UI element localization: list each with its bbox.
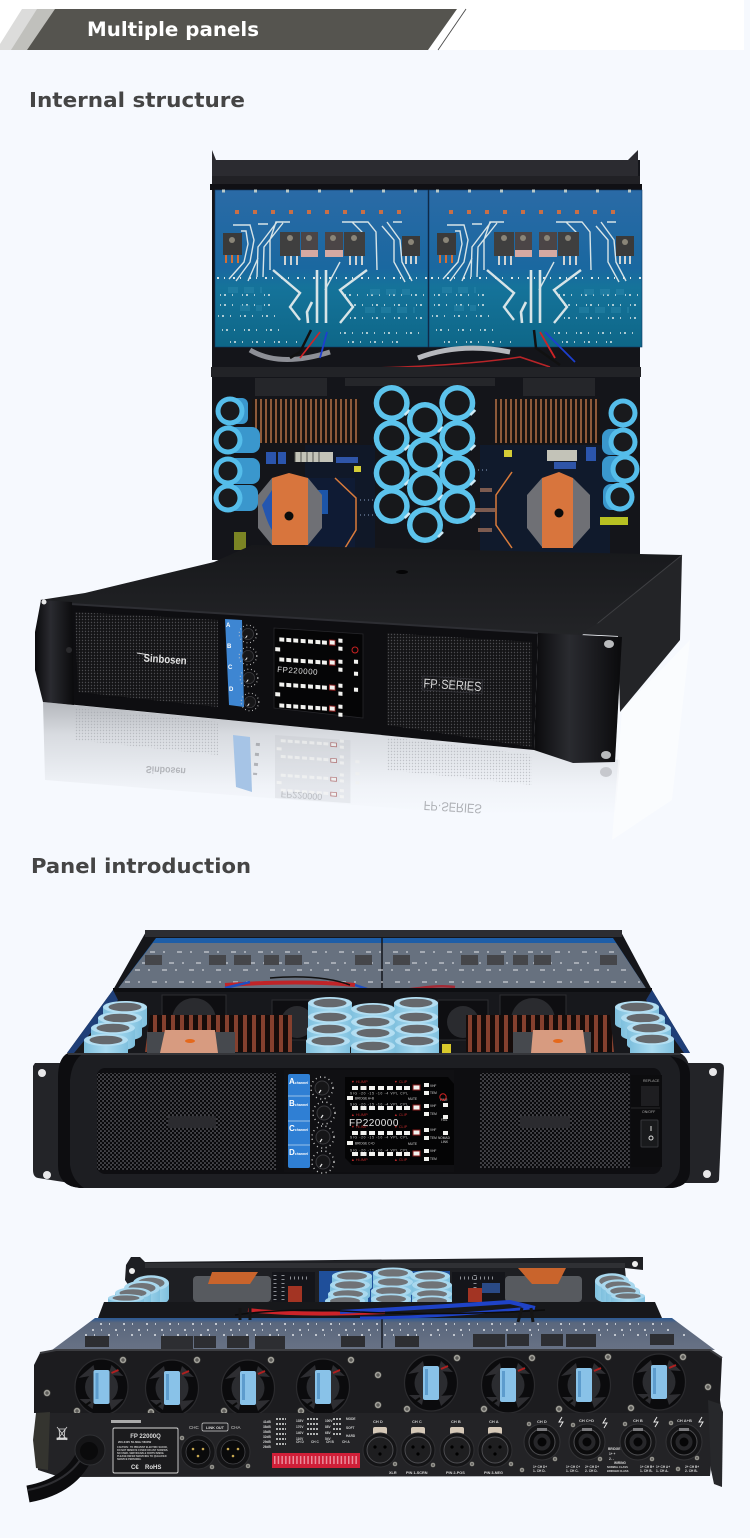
DIP switch table: 170V (296, 1425, 304, 1429)
header band (0, 0, 744, 50)
capacitors right (615, 1001, 674, 1062)
circuit board (52, 1318, 715, 1350)
right handle and ear (534, 633, 622, 763)
LED display: VHF (430, 1149, 436, 1153)
heading: panel introduction: Panel introduction (31, 854, 251, 878)
fans (75, 1354, 686, 1416)
LED display: MUTE (408, 1142, 417, 1146)
LED display: SIG -20 -15 -10 -4 VPL CPL (350, 1092, 408, 1096)
LED display (345, 1077, 454, 1165)
capacitors left (214, 396, 260, 512)
right bracket (708, 1400, 723, 1487)
wires (225, 977, 455, 995)
lower interior (67, 990, 690, 1053)
speaker outputs: 1- CH A- (656, 1469, 668, 1473)
DIP switch table: 32dB (263, 1435, 271, 1439)
DIP switch table: 100V (325, 1419, 333, 1423)
model label box: RoHS (145, 1465, 161, 1471)
XLR input jacks: CH A (489, 1419, 499, 1424)
fan panel (34, 1350, 722, 1416)
model label box (113, 1428, 178, 1473)
heatsink right (495, 399, 600, 443)
connector panel (28, 1400, 723, 1494)
speaker outputs: 2+ CH B+ (685, 1465, 699, 1469)
LED display: BRIDGE C+D (355, 1142, 375, 1146)
XLR input jacks: CH C (412, 1419, 422, 1424)
mounting ears (33, 1063, 724, 1183)
level knobs (311, 1077, 335, 1173)
transformer right (505, 1268, 582, 1302)
LED display: BRIDGE A+B (355, 1096, 374, 1100)
speaker outputs: 1+ CH C+ (566, 1465, 580, 1469)
speaker outputs: 1+ CH A+ (656, 1465, 670, 1469)
far bracket (125, 1257, 643, 1303)
channel strip: Dchannel (289, 1148, 308, 1157)
front panel body with handles (58, 1053, 690, 1188)
control panel: B (227, 644, 232, 650)
speaker outputs: CH D (537, 1419, 547, 1424)
heading: internal structure: Internal structure (29, 88, 245, 112)
model label box: FP 22000Q (130, 1434, 161, 1440)
speaker outputs (519, 1417, 703, 1473)
LED display: TEM (430, 1112, 437, 1116)
LED display: FAIL (441, 1118, 448, 1122)
link out section: CHC (189, 1425, 199, 1430)
LED display: SIG -20 -15 -10 -4 VPL CPL (350, 1148, 408, 1152)
amplifier body (35, 545, 682, 763)
LED display: ▼ HI-IMP (351, 1080, 368, 1084)
DIP switch table: HARD (346, 1434, 356, 1438)
LED display: ▲ HI-IMP (351, 1113, 368, 1117)
DIP switch table: 29dB (263, 1440, 271, 1444)
right side (578, 555, 682, 712)
brand logo: Sinbosen (143, 652, 187, 667)
model label box: CAUTION : TO PREVENT ELECTRIC SHOCK, (117, 1446, 168, 1449)
XLR input jacks: PIN 2-POS (446, 1471, 465, 1475)
link out section (179, 1423, 251, 1470)
photo: amplifier with open interior and reflection (35, 150, 690, 840)
DIP switch table: 35dB (263, 1430, 271, 1434)
photo: rear view of open amplifier (28, 1257, 723, 1494)
left handle (35, 600, 74, 705)
model label box: C€ (131, 1465, 139, 1471)
power switch panel: REPLACE (643, 1079, 660, 1083)
left grille (75, 612, 218, 707)
capacitors centre (325, 1268, 452, 1317)
speaker outputs: 2- CH D- (585, 1469, 598, 1473)
wire bundle (235, 1302, 545, 1322)
DIP switch table: 38dB (263, 1425, 271, 1429)
control panel: C (228, 665, 233, 671)
control panel (225, 619, 363, 718)
DIP switch table: 26dB (263, 1445, 271, 1449)
photo: front view of open amplifier (33, 930, 724, 1188)
DIP switch table: CH C (311, 1440, 319, 1444)
DIP switch table: 135V (296, 1419, 304, 1423)
LED display: NOMAD (438, 1136, 451, 1140)
speaker outputs: CH A+B (677, 1418, 692, 1423)
XLR input jacks: CH D (373, 1419, 383, 1424)
transformer left (258, 473, 322, 545)
transformer left (193, 1272, 271, 1302)
XLR input jacks: CH B (451, 1419, 461, 1424)
heatsink right (466, 1015, 614, 1052)
XLR input jacks (363, 1419, 514, 1475)
DIP switch table: 54V (325, 1437, 332, 1441)
header title: Multiple panels (87, 18, 259, 41)
DIP switch table: CH A (342, 1440, 350, 1444)
channel strip: Achannel (289, 1077, 308, 1086)
transistors row (145, 955, 617, 965)
DIP switch table: 88V (325, 1425, 332, 1429)
mid bar (98, 1302, 662, 1318)
LED display: VHF (430, 1128, 436, 1132)
LED display: PWR (440, 1098, 448, 1102)
heatsink left (252, 399, 360, 443)
XLR input jacks: XLR (389, 1471, 397, 1475)
speaker outputs: 1+ + (609, 1452, 616, 1456)
heatsink left (145, 1015, 292, 1052)
link out section: CHA (231, 1425, 241, 1430)
speaker outputs: 2+ CH D+ (585, 1465, 599, 1469)
capacitors left (108, 1275, 169, 1309)
left grille (97, 1073, 276, 1170)
model name: FP220000 (349, 1118, 399, 1129)
circuit boards (215, 190, 642, 347)
speaker outputs: 1+ CH B+ (640, 1465, 654, 1469)
cooling fans (255, 378, 595, 396)
model label box: PLEASE REFER SERVICING TO QUALIFIED (117, 1455, 167, 1458)
power cord (28, 1435, 105, 1494)
control panel (284, 1070, 454, 1173)
speaker outputs: 1+ CH D+ (533, 1465, 547, 1469)
reflected brand: Sinbosen (146, 763, 186, 776)
speaker outputs: 1- CH C- (566, 1469, 579, 1473)
speaker outputs: BRIDGED CLASS (607, 1469, 629, 1473)
channel strip: Bchannel (289, 1099, 308, 1108)
top lid (40, 545, 682, 636)
front face (66, 604, 538, 750)
speaker outputs: WIRING (614, 1461, 626, 1465)
serial bar (111, 1420, 141, 1423)
XLR input jacks: PIN 3-NEG (484, 1471, 503, 1475)
model label box: DO NOT REMOVE COVER OR ANY SCREWS. (117, 1449, 168, 1452)
capacitors right (595, 1273, 645, 1307)
speaker outputs: 1- CH B- (640, 1469, 653, 1473)
rear section with boards (113, 930, 652, 995)
link out section: LINK OUT (206, 1426, 225, 1430)
speaker outputs: BRIDGE (608, 1447, 620, 1451)
right grille (387, 633, 532, 747)
LED display: TEM (430, 1091, 437, 1095)
DIP switch table (263, 1417, 360, 1468)
divider bar (211, 367, 641, 377)
red DIP switches (272, 1453, 360, 1468)
reflected FP·SERIES logo: FP·SERIES (423, 798, 482, 817)
mounting screws (43, 1353, 712, 1416)
LED display: ▼ CLIP (394, 1125, 408, 1129)
LED display: VHF (430, 1104, 436, 1108)
LED display: LINK (441, 1140, 449, 1144)
DIP switch table: SOFT (346, 1426, 355, 1430)
transformer left (147, 1030, 235, 1053)
DIP switch table: 41dB (263, 1420, 271, 1424)
DIP switch table: CH D (296, 1440, 304, 1444)
transformer right (513, 1030, 591, 1053)
LED display: ▲ CLIP (394, 1158, 408, 1162)
model label box: 200-240V 50-60Hz 5600W (118, 1440, 151, 1444)
LED display: SIG -20 -15 -10 -4 VPL CPL (350, 1102, 408, 1106)
power switch panel (631, 1075, 662, 1167)
channel strip (288, 1074, 310, 1168)
LED display: MUTE (408, 1097, 417, 1101)
fans (162, 995, 566, 1045)
speaker outputs: CH C+D (579, 1418, 594, 1423)
model label box: NO USER- SERVICEABLE PARTS INSIDE. (117, 1452, 165, 1455)
LED display: VHF (430, 1084, 436, 1088)
reflection of amplifier (43, 640, 690, 840)
DIP switch table: CH B (326, 1440, 334, 1444)
control panel: FP220000 (277, 665, 318, 677)
speaker outputs: CH B (633, 1418, 643, 1423)
left flap (33, 1412, 50, 1470)
LED display: ▲ HI-IMP (351, 1158, 368, 1162)
wiring (250, 330, 575, 368)
rear interior contents (108, 1268, 645, 1317)
DIP switch table: 110V (296, 1437, 304, 1441)
DIP switch table: 68V (325, 1431, 332, 1435)
FP series logo: FP·SERIES (423, 676, 482, 694)
speaker outputs: 2- CH B- (685, 1469, 698, 1473)
power switch panel: ON/OFF (642, 1110, 655, 1114)
control panel: D (229, 687, 234, 693)
DIP switch table: 140V (296, 1431, 304, 1435)
speaker outputs: 1- CH D- (533, 1469, 546, 1473)
capacitors centre (306, 997, 451, 1069)
LED display: TEM (430, 1157, 437, 1161)
DIP switch table: MODE (346, 1417, 356, 1421)
LED display: SIG -20 -15 -10 -4 VPL CPL (350, 1136, 408, 1140)
right grille (480, 1073, 630, 1168)
LED display: ▼ CLIP (394, 1080, 408, 1084)
speaker outputs: 2- - (609, 1457, 614, 1461)
model label box: SERVICE PERSONEL (117, 1458, 142, 1461)
control panel: A (226, 623, 231, 629)
capacitors right (602, 398, 640, 512)
channel strip: Cchannel (289, 1124, 308, 1133)
reflected model: FP220000 (280, 789, 323, 802)
LED display: TEM (430, 1136, 437, 1140)
XLR input jacks: PIN 1-SCRN (406, 1471, 428, 1475)
capacitors centre (374, 385, 475, 543)
recycling icon (57, 1427, 67, 1440)
capacitors left (84, 1001, 147, 1063)
interior chassis (210, 150, 642, 560)
LED display: ▼ HI-IMP (351, 1125, 368, 1129)
speaker outputs: NORMAL CLASS (607, 1465, 628, 1469)
lower interior boards (234, 445, 628, 555)
transformer right (527, 472, 590, 548)
LED display: ▲ CLIP (394, 1113, 408, 1117)
